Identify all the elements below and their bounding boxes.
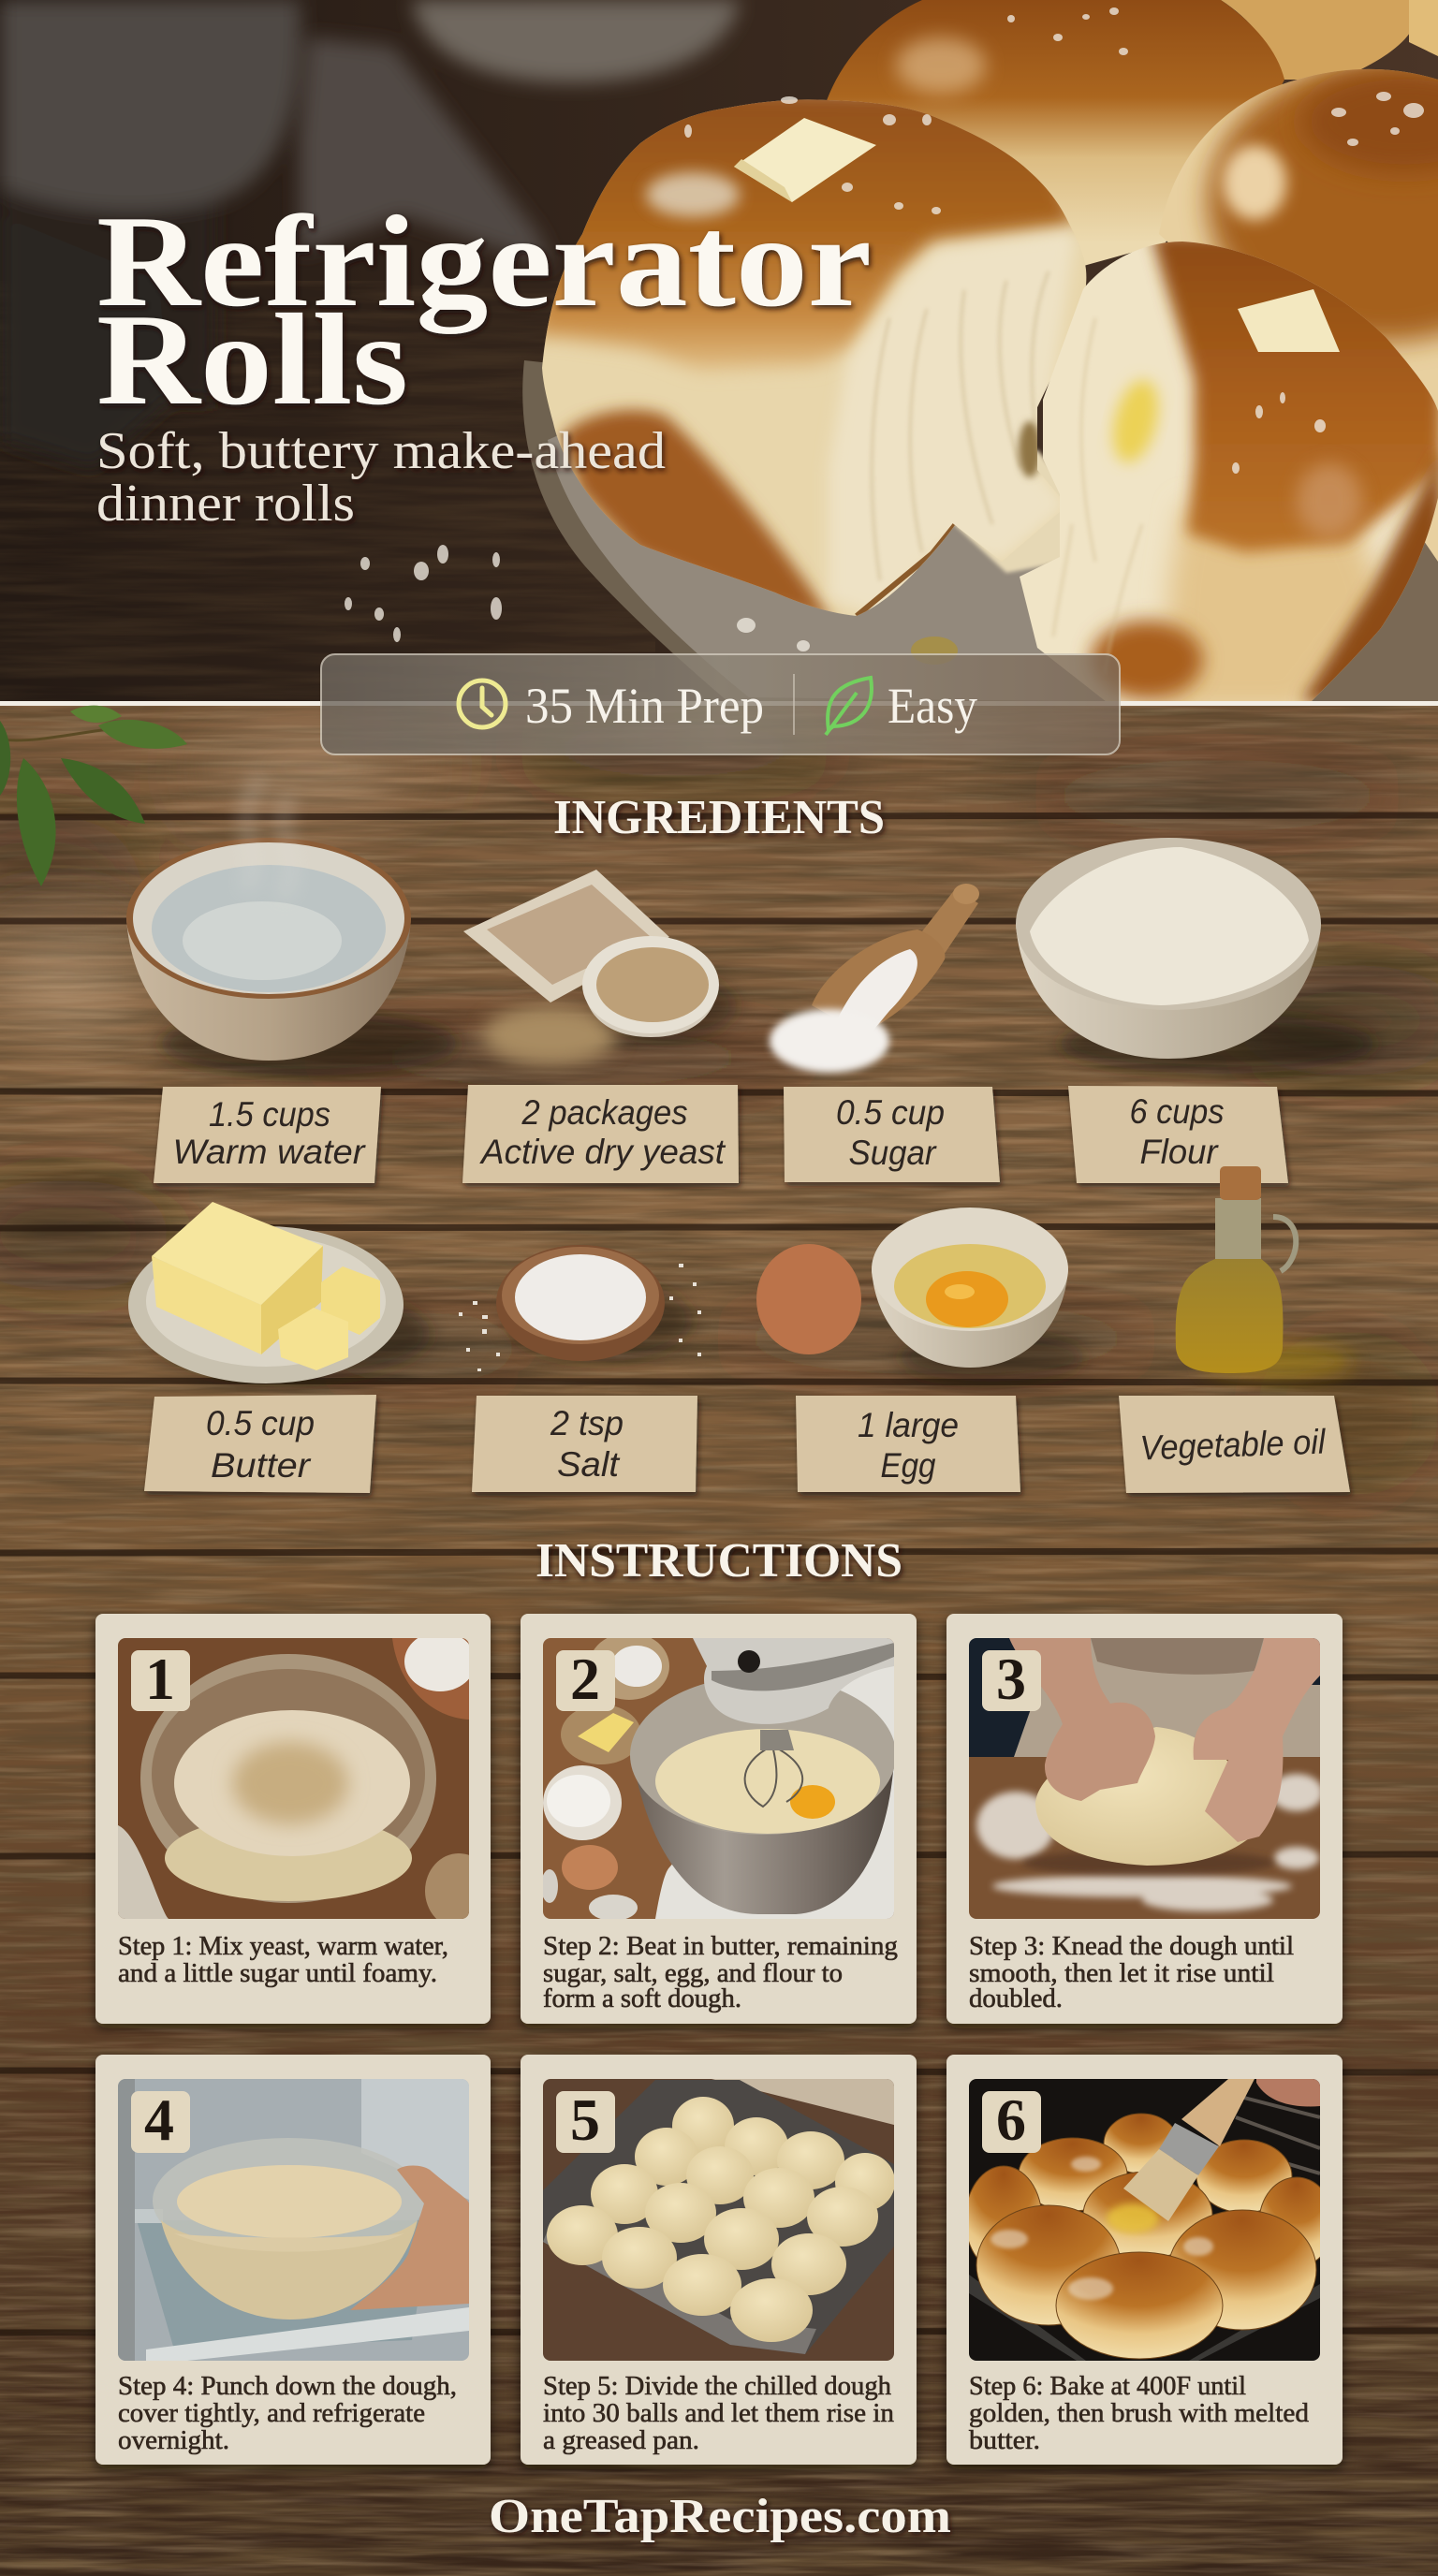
badge 3: 3	[996, 1646, 1026, 1712]
ingredient label: butter	[144, 1395, 376, 1493]
ingredient label: water: 1.5 cups	[209, 1095, 330, 1134]
step 6 text: butter.	[969, 2426, 1040, 2455]
ingredient label: oil: Vegetable oil	[1139, 1423, 1328, 1467]
ingredient label: oil	[1119, 1396, 1350, 1493]
icon: clock	[459, 681, 506, 727]
far top rolls	[1221, 0, 1416, 80]
badge 4	[131, 2086, 190, 2153]
step 4 text: cover tightly, and refrigerate	[118, 2399, 425, 2428]
ingredient label: butter: Butter	[211, 1446, 312, 1485]
mixer bowl	[633, 1760, 894, 1914]
mixer head	[693, 1638, 894, 1724]
step 6 photo	[965, 2079, 1334, 2361]
ingredient label: water	[154, 1087, 381, 1183]
ingredient label: sugar	[784, 1087, 1000, 1182]
ingredient label: flour	[1068, 1086, 1288, 1183]
info pill	[321, 654, 1120, 754]
ingredient: egg	[756, 1244, 861, 1354]
step 5 text: into 30 balls and let them rise in	[543, 2399, 894, 2428]
difficulty: Easy	[888, 678, 977, 734]
step 3 photo	[969, 1638, 1323, 1919]
subtitle: dinner rolls	[96, 475, 355, 533]
salt flakes on rolls and table	[345, 7, 1424, 651]
step 5 text: Step 5: Divide the chilled dough	[543, 2372, 891, 2401]
badge 3	[982, 1646, 1041, 1712]
right roll	[1152, 56, 1438, 580]
prep time: 35 Min Prep	[525, 678, 764, 734]
title: Rolls	[96, 287, 408, 432]
wood table background	[0, 702, 1438, 2576]
ingredient: flour bowl	[1016, 838, 1376, 1074]
step 1 photo	[118, 1632, 492, 1928]
step 5 photo	[543, 2079, 895, 2361]
step 4 text: Step 4: Punch down the dough,	[118, 2372, 457, 2401]
ingredient label: salt: Salt	[557, 1445, 621, 1484]
heading: instructions: INSTRUCTIONS	[536, 1534, 902, 1588]
hero photo: buttery rolls on a plate	[0, 0, 1438, 711]
step 5 text: a greased pan.	[543, 2426, 699, 2455]
badge 6: 6	[996, 2086, 1026, 2153]
botanical sprig	[0, 706, 187, 886]
whisk	[745, 1746, 802, 1807]
ingredient label: yeast: 2 packages	[521, 1093, 687, 1132]
step card 4	[95, 2055, 491, 2465]
badge 5: 5	[570, 2086, 600, 2153]
step card 2	[521, 1614, 917, 2024]
step 6 text	[969, 2372, 1309, 2455]
ingredient label: flour: Flour	[1140, 1133, 1219, 1171]
badge 1	[131, 1646, 190, 1712]
step 2 text: form a soft dough.	[543, 1984, 741, 2013]
ingredient label: salt	[472, 1396, 697, 1492]
ingredient: butter on plate	[128, 1202, 431, 1383]
footer website: OneTapRecipes.com	[489, 2490, 951, 2543]
back top roll	[826, 0, 1284, 281]
step 5 text	[543, 2372, 894, 2455]
arms and hands	[1009, 1638, 1155, 1801]
ingredient label: egg: 1 large	[858, 1406, 959, 1444]
step 1 text	[118, 1932, 448, 1988]
butter pat main	[734, 118, 876, 202]
ingredient label: sugar: 0.5 cup	[836, 1093, 945, 1132]
ingredient: cracked egg bowl	[872, 1208, 1086, 1382]
subtitle: Soft, buttery make-ahead	[96, 422, 666, 480]
title: Refrigerator	[96, 189, 872, 334]
ingredient label: yeast: Active dry yeast	[479, 1133, 726, 1171]
step 6 text: golden, then brush with melted	[969, 2399, 1309, 2428]
step 4 text: overnight.	[118, 2426, 229, 2455]
step 6 text: Step 6: Bake at 400F until	[969, 2372, 1246, 2401]
step 1 text: Step 1: Mix yeast, warm water,	[118, 1932, 448, 1961]
divider line	[0, 701, 1438, 706]
badge 1: 1	[145, 1646, 175, 1712]
icon: leaf	[826, 678, 872, 735]
ingredient: oil bottle	[1176, 1166, 1353, 1379]
ingredient label: butter: 0.5 cup	[206, 1404, 315, 1442]
step card 1	[95, 1614, 492, 2024]
badge 4: 4	[144, 2086, 174, 2153]
ingredient: yeast packet and bowl	[463, 870, 737, 1065]
ingredient label: salt: 2 tsp	[550, 1404, 624, 1442]
title	[96, 189, 872, 432]
step 3 text: smooth, then let it rise until	[969, 1959, 1274, 1988]
step 4 photo	[118, 2079, 469, 2361]
mixer stand and base	[655, 1657, 894, 1919]
badge 2	[556, 1646, 615, 1712]
ingredient label: yeast	[462, 1085, 739, 1183]
ingredient: warm water bowl	[126, 777, 459, 1076]
badge 2: 2	[570, 1646, 600, 1712]
subtitle	[96, 422, 666, 533]
step 3 text: doubled.	[969, 1984, 1063, 2013]
step 2 text: Step 2: Beat in butter, remaining	[543, 1932, 898, 1961]
step 2 text	[543, 1932, 898, 2013]
step 4 text	[118, 2372, 457, 2455]
side bowls	[589, 1632, 669, 1700]
blurred bowls and towel	[0, 0, 740, 468]
ingredient label: flour: 6 cups	[1129, 1092, 1225, 1131]
step 2 text: sugar, salt, egg, and flour to	[543, 1959, 843, 1988]
step 3 text: Step 3: Knead the dough until	[969, 1932, 1294, 1961]
badge 5	[556, 2086, 615, 2153]
butter pat front	[1238, 289, 1340, 352]
main torn roll	[542, 99, 1086, 616]
ingredient label: water: Warm water	[172, 1133, 366, 1171]
heading: ingredients: INGREDIENTS	[553, 791, 885, 844]
ingredient: salt bowl	[459, 1245, 701, 1371]
plate	[522, 360, 1017, 701]
step 1 text: and a little sugar until foamy.	[118, 1959, 437, 1988]
step card 6	[946, 2055, 1343, 2465]
dough strand	[955, 449, 1067, 573]
front torn roll	[1016, 234, 1438, 711]
ingredient label: sugar: Sugar	[848, 1134, 937, 1172]
step 3 text	[969, 1932, 1294, 2013]
ingredient label: egg: Egg	[880, 1446, 936, 1485]
step card 3	[946, 1614, 1343, 2024]
badge 6	[982, 2086, 1041, 2153]
ingredient label: egg	[796, 1396, 1020, 1492]
step 2 photo	[541, 1632, 896, 1921]
ingredient: sugar scoop	[770, 884, 979, 1073]
step card 5	[521, 2055, 917, 2465]
